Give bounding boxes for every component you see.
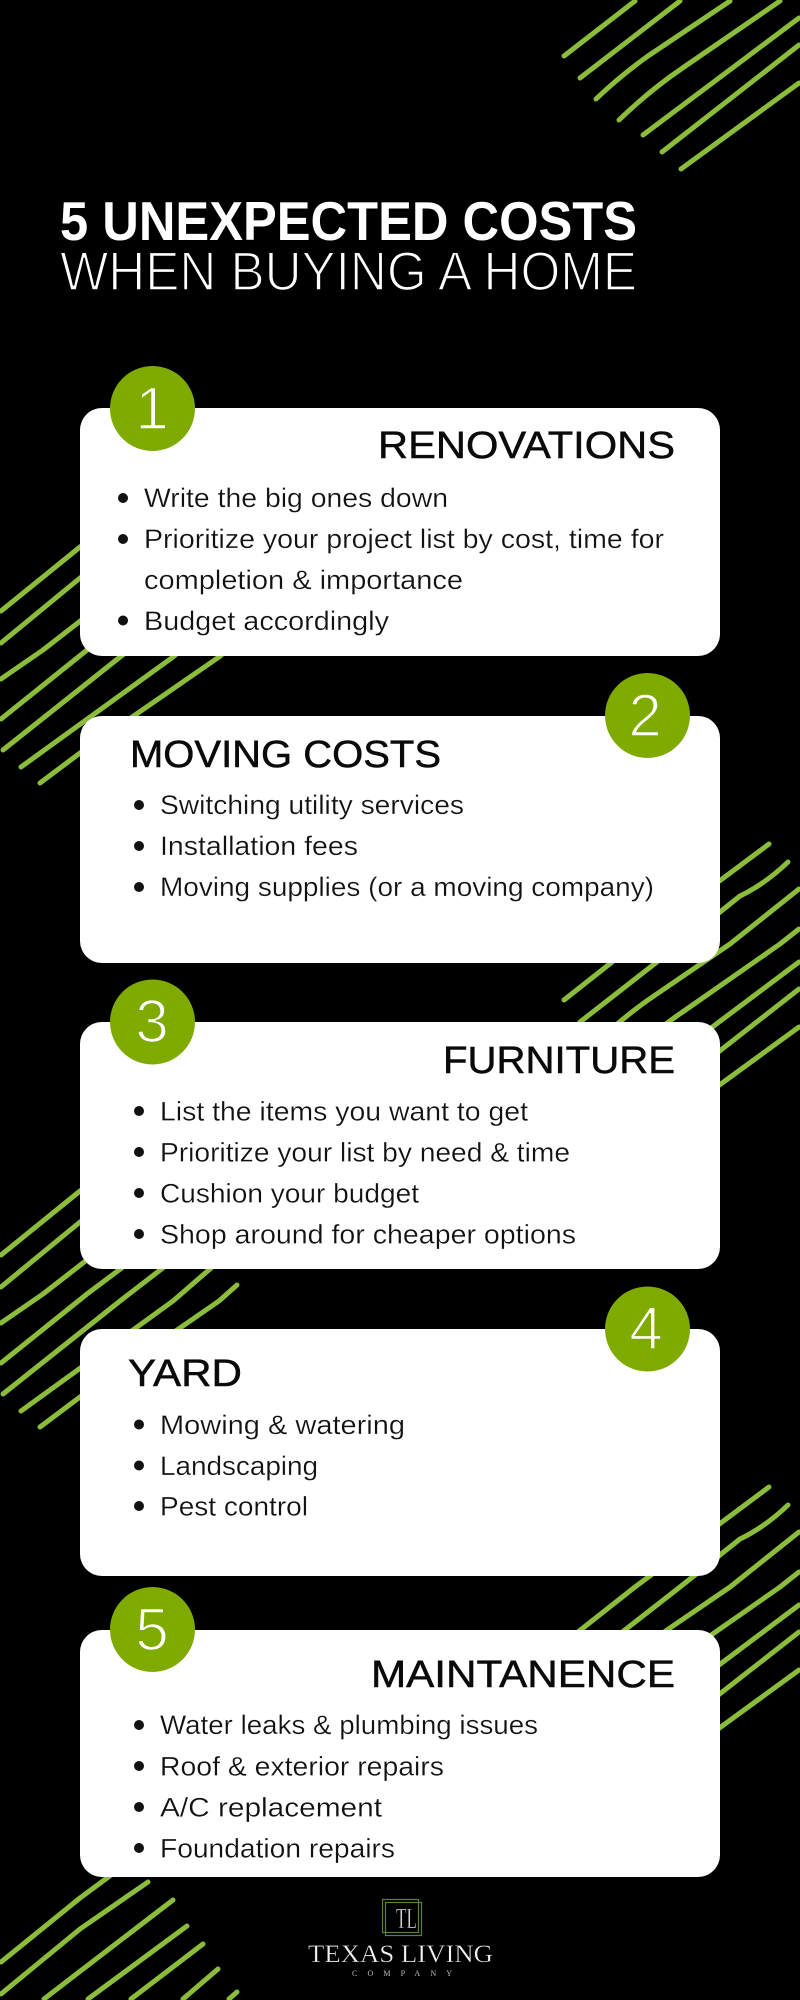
- list: furniture: Shop around for cheaper options: [160, 1220, 576, 1250]
- number badge 1: 1: [135, 375, 169, 442]
- heading: furniture: FURNITURE: [443, 1040, 675, 1082]
- decorative lines: right lower: [564, 1487, 799, 1756]
- title line 2: WHEN BUYING A HOME: [60, 240, 637, 302]
- number badge 4: 4: [629, 1295, 663, 1362]
- logo mark: [382, 1900, 422, 1936]
- list: maintanence: [134, 1710, 538, 1864]
- decorative lines: right middle: [564, 844, 799, 1113]
- logo wordmark: TEXAS LIVING: [308, 1941, 493, 1968]
- number badge 1: [110, 366, 195, 451]
- number badge 5: [110, 1587, 195, 1672]
- list: yard: Landscaping: [160, 1451, 318, 1481]
- number badge 2: [605, 673, 690, 758]
- decorative lines: top right: [564, 1, 799, 169]
- panel: yard: [80, 1286, 720, 1576]
- list: moving costs: Moving supplies (or a moving company): [160, 872, 654, 902]
- panel: renovations: [80, 366, 720, 656]
- list: yard: Mowing & watering: [160, 1410, 405, 1440]
- list: maintanence: Water leaks & plumbing issues: [160, 1710, 538, 1740]
- heading: yard: YARD: [128, 1353, 242, 1395]
- number badge 3: [110, 980, 195, 1064]
- list: furniture: [134, 1096, 576, 1250]
- heading: maintanence: MAINTANENCE: [371, 1654, 675, 1696]
- decorative lines: left bottom: [1, 1861, 237, 1999]
- list: maintanence: A/C replacement: [160, 1792, 383, 1822]
- heading: renovations: RENOVATIONS: [378, 425, 675, 467]
- logo mark: TL: [396, 1904, 417, 1935]
- list: moving costs: Installation fees: [160, 831, 358, 861]
- panel: maintanence: [80, 1587, 720, 1877]
- list: renovations: Budget accordingly: [144, 606, 390, 636]
- list: furniture: List the items you want to get: [160, 1096, 529, 1126]
- list: renovations: completion & importance: [144, 565, 463, 595]
- title line 1: 5 UNEXPECTED COSTS: [60, 190, 637, 252]
- title: [60, 190, 637, 302]
- list: renovations: [118, 483, 664, 636]
- list: renovations: Write the big ones down: [144, 483, 448, 513]
- heading: moving costs: MOVING COSTS: [130, 734, 441, 776]
- number badge 4: [605, 1286, 690, 1372]
- panel: furniture: [80, 980, 720, 1269]
- list: yard: Pest control: [160, 1492, 308, 1522]
- number badge 3: 3: [135, 988, 169, 1055]
- list: moving costs: [134, 790, 654, 902]
- logo sub-wordmark: COMPANY: [352, 1969, 452, 1978]
- list: renovations: Prioritize your project list by cost, time for: [144, 524, 664, 554]
- list: maintanence: Foundation repairs: [160, 1834, 395, 1864]
- list: yard: [134, 1410, 405, 1522]
- logo: Texas Living Company: [308, 1900, 493, 1978]
- number badge 2: 2: [628, 682, 662, 749]
- list: moving costs: Switching utility services: [160, 790, 464, 820]
- list: furniture: Cushion your budget: [160, 1178, 420, 1208]
- decorative lines: left upper: [1, 510, 237, 783]
- number badge 5: 5: [135, 1596, 169, 1663]
- decorative lines: left middle: [1, 1154, 237, 1427]
- list: maintanence: Roof & exterior repairs: [160, 1752, 444, 1782]
- panel: moving costs: [80, 673, 720, 963]
- list: furniture: Prioritize your list by need & time: [160, 1138, 570, 1168]
